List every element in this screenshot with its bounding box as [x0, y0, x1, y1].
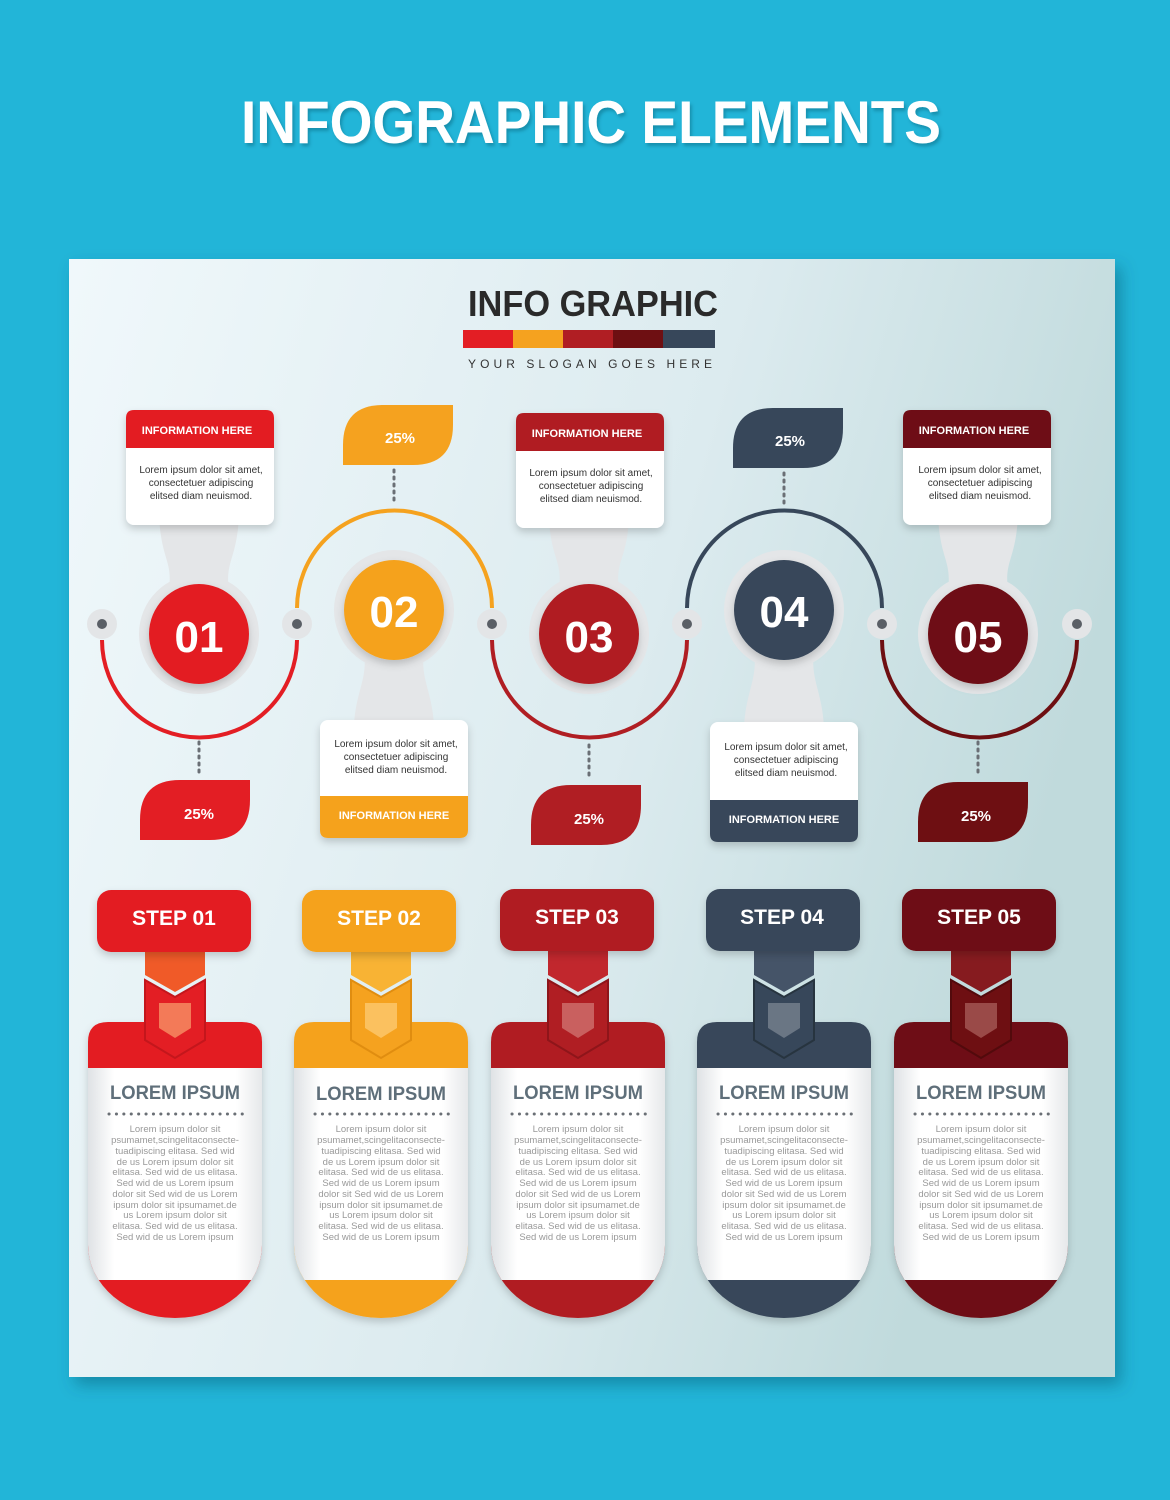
text: card 02: dolor sit Sed wid de us Lorem	[318, 1189, 444, 1200]
card: info 03	[516, 413, 664, 528]
text: card 03: Lorem ipsum dolor sit	[533, 1124, 624, 1135]
card: info 04: INFORMATION HERE	[729, 814, 839, 826]
tab: step 01: STEP 01	[132, 907, 216, 930]
card: info 04	[710, 722, 858, 842]
leaf 04: 25%	[775, 433, 805, 450]
step card 02	[294, 890, 468, 1318]
step card 05	[894, 889, 1068, 1318]
chevron arrow 05	[951, 945, 1011, 1058]
text: card 03: psumamet,scingelitaconsecte-	[514, 1135, 642, 1146]
text: card 02: de us Lorem ipsum dolor sit	[323, 1157, 440, 1168]
card: info 02: elitsed diam neuismod.	[345, 765, 447, 776]
circle 02	[344, 560, 444, 660]
text: card 01: tuadipiscing elitasa. Sed wid	[115, 1146, 235, 1157]
text: card 05: elitasa. Sed wid de us elitasa.	[918, 1167, 1044, 1178]
card: info 03: Lorem ipsum dolor sit amet,	[529, 468, 653, 479]
text: card 01: psumamet,scingelitaconsecte-	[111, 1135, 239, 1146]
card: info 04: Lorem ipsum dolor sit amet,	[724, 742, 848, 753]
tab: step 03: STEP 03	[535, 906, 619, 929]
text: card 04: Sed wid de us Lorem ipsum	[725, 1232, 843, 1243]
text: card 01: ipsum dolor sit ipsumamet.de	[113, 1200, 237, 1211]
tab: step 05: STEP 05	[937, 906, 1021, 929]
card: info 03: consectetuer adipiscing	[539, 481, 643, 492]
step card 01	[88, 890, 262, 1318]
tab: step 01	[97, 890, 251, 952]
leaf 01	[140, 780, 250, 840]
step card 04	[697, 889, 871, 1318]
text: card 05: Lorem ipsum dolor sit	[936, 1124, 1027, 1135]
card: info 01: Lorem ipsum dolor sit amet,	[139, 465, 263, 476]
text: card 01: LOREM IPSUM	[110, 1083, 240, 1104]
card: info 05: Lorem ipsum dolor sit amet,	[918, 465, 1042, 476]
text: card 03: elitasa. Sed wid de us elitasa.	[515, 1167, 641, 1178]
text: card 05: Sed wid de us Lorem ipsum	[922, 1178, 1040, 1189]
text: card 02: LOREM IPSUM	[316, 1084, 446, 1105]
text: card 04: elitasa. Sed wid de us elitasa.	[721, 1167, 847, 1178]
card: info 05	[903, 410, 1051, 525]
text: card 03: de us Lorem ipsum dolor sit	[520, 1157, 637, 1168]
text: card 03: Sed wid de us Lorem ipsum	[519, 1178, 637, 1189]
card: info 04: elitsed diam neuismod.	[735, 768, 837, 779]
card: info 05: elitsed diam neuismod.	[929, 491, 1031, 502]
panel: main	[69, 259, 1115, 1377]
text: card 02: elitasa. Sed wid de us elitasa.	[318, 1167, 444, 1178]
leaf 01: 25%	[184, 806, 214, 823]
text: card 02: Lorem ipsum dolor sit	[336, 1124, 427, 1135]
text: card 04: LOREM IPSUM	[719, 1083, 849, 1104]
step 02 top	[320, 405, 468, 838]
text: card 03: tuadipiscing elitasa. Sed wid	[518, 1146, 638, 1157]
text: card 01: Lorem ipsum dolor sit	[130, 1124, 221, 1135]
text: card 01: dolor sit Sed wid de us Lorem	[112, 1189, 238, 1200]
card: info 05: consectetuer adipiscing	[928, 478, 1032, 489]
card: info 02: INFORMATION HERE	[339, 810, 449, 822]
leaf 04	[733, 408, 843, 468]
text: card 05: dolor sit Sed wid de us Lorem	[918, 1189, 1044, 1200]
step 03 top	[516, 413, 664, 845]
text: card 05: elitasa. Sed wid de us elitasa.	[918, 1221, 1044, 1232]
text: card 03: Sed wid de us Lorem ipsum	[519, 1232, 637, 1243]
text: card 02: us Lorem ipsum dolor sit	[329, 1210, 433, 1221]
leaf 02: 25%	[385, 430, 415, 447]
tab: step 05	[902, 889, 1056, 951]
text: card 02: ipsum dolor sit ipsumamet.de	[319, 1200, 443, 1211]
text: card 04: psumamet,scingelitaconsecte-	[720, 1135, 848, 1146]
heading: info graphic: YOUR SLOGAN GOES HERE	[468, 357, 712, 371]
text: card 01: us Lorem ipsum dolor sit	[123, 1210, 227, 1221]
text: card 01: de us Lorem ipsum dolor sit	[117, 1157, 234, 1168]
text: card 02: elitasa. Sed wid de us elitasa.	[318, 1221, 444, 1232]
text: card 03: ipsum dolor sit ipsumamet.de	[516, 1200, 640, 1211]
text: card 04: de us Lorem ipsum dolor sit	[726, 1157, 843, 1168]
step 04 top	[710, 408, 858, 842]
card: info 01	[126, 410, 274, 525]
circle 05	[928, 584, 1028, 684]
leaf 05: 25%	[961, 808, 991, 825]
text: card 04	[718, 1083, 856, 1243]
text: card 04: ipsum dolor sit ipsumamet.de	[722, 1200, 846, 1211]
text: card 01: elitasa. Sed wid de us elitasa.	[112, 1167, 238, 1178]
circle 04: 04	[760, 588, 809, 637]
circle 04	[734, 560, 834, 660]
title: INFOGRAPHIC ELEMENTS	[241, 89, 941, 156]
card: info 05: INFORMATION HERE	[919, 425, 1029, 437]
heading: info graphic	[463, 283, 718, 371]
leaf 03	[531, 785, 641, 845]
text: card 03: LOREM IPSUM	[513, 1083, 643, 1104]
text: card 04: elitasa. Sed wid de us elitasa.	[721, 1221, 847, 1232]
card: info 02: consectetuer adipiscing	[344, 752, 448, 763]
text: card 03: dolor sit Sed wid de us Lorem	[515, 1189, 641, 1200]
step card 03	[491, 889, 665, 1318]
text: card 04: Sed wid de us Lorem ipsum	[725, 1178, 843, 1189]
text: card 04: tuadipiscing elitasa. Sed wid	[724, 1146, 844, 1157]
text: card 05: LOREM IPSUM	[916, 1083, 1046, 1104]
text: card 05	[915, 1083, 1053, 1243]
circle 01: 01	[175, 613, 223, 662]
text: card 01: elitasa. Sed wid de us elitasa.	[112, 1221, 238, 1232]
text: card 03: us Lorem ipsum dolor sit	[526, 1210, 630, 1221]
arcs timeline	[102, 510, 1077, 738]
card: info 01: INFORMATION HERE	[142, 425, 252, 437]
text: card 02: tuadipiscing elitasa. Sed wid	[321, 1146, 441, 1157]
tab: step 02	[302, 890, 456, 952]
tab: step 03	[500, 889, 654, 951]
text: card 01: Sed wid de us Lorem ipsum	[116, 1232, 234, 1243]
text: card 05: tuadipiscing elitasa. Sed wid	[921, 1146, 1041, 1157]
card: info 02: Lorem ipsum dolor sit amet,	[334, 739, 458, 750]
chevron arrow 01	[145, 945, 205, 1058]
leaf 05	[918, 782, 1028, 842]
text: card 05: Sed wid de us Lorem ipsum	[922, 1232, 1040, 1243]
tab: step 04	[706, 889, 860, 951]
circle 03: 03	[565, 613, 613, 662]
card: info 03: elitsed diam neuismod.	[540, 494, 642, 505]
leaf 02	[343, 405, 453, 465]
text: card 04: Lorem ipsum dolor sit	[739, 1124, 830, 1135]
step 01 top	[126, 410, 274, 840]
text: card 02	[315, 1084, 453, 1243]
circle 02: 02	[370, 588, 418, 637]
circle 01	[149, 584, 249, 684]
step 05 top	[903, 410, 1051, 842]
text: card 02: psumamet,scingelitaconsecte-	[317, 1135, 445, 1146]
text: card 04: dolor sit Sed wid de us Lorem	[721, 1189, 847, 1200]
chevron arrow 03	[548, 945, 608, 1058]
card: info 01: consectetuer adipiscing	[149, 478, 253, 489]
heading: info graphic: INFO GRAPHIC	[468, 283, 718, 324]
circle 05: 05	[954, 613, 1002, 662]
text: card 05: us Lorem ipsum dolor sit	[929, 1210, 1033, 1221]
text: card 01: Sed wid de us Lorem ipsum	[116, 1178, 234, 1189]
card: info 01: elitsed diam neuismod.	[150, 491, 252, 502]
text: card 05: de us Lorem ipsum dolor sit	[923, 1157, 1040, 1168]
tab: step 02: STEP 02	[337, 907, 421, 930]
chevron arrow 04	[754, 945, 814, 1058]
chevron arrow 02	[351, 945, 411, 1058]
text: card 03	[512, 1083, 650, 1243]
circle 03	[539, 584, 639, 684]
card: info 04: consectetuer adipiscing	[734, 755, 838, 766]
text: card 05: psumamet,scingelitaconsecte-	[917, 1135, 1045, 1146]
tab: step 04: STEP 04	[740, 906, 824, 929]
text: card 04: us Lorem ipsum dolor sit	[732, 1210, 836, 1221]
timeline dots	[87, 609, 1092, 639]
text: card 01	[109, 1083, 247, 1243]
leaf 03: 25%	[574, 811, 604, 828]
text: card 03: elitasa. Sed wid de us elitasa.	[515, 1221, 641, 1232]
card: info 02	[320, 720, 468, 838]
text: card 02: Sed wid de us Lorem ipsum	[322, 1232, 440, 1243]
card: info 03: INFORMATION HERE	[532, 428, 642, 440]
text: card 05: ipsum dolor sit ipsumamet.de	[919, 1200, 1043, 1211]
text: card 02: Sed wid de us Lorem ipsum	[322, 1178, 440, 1189]
